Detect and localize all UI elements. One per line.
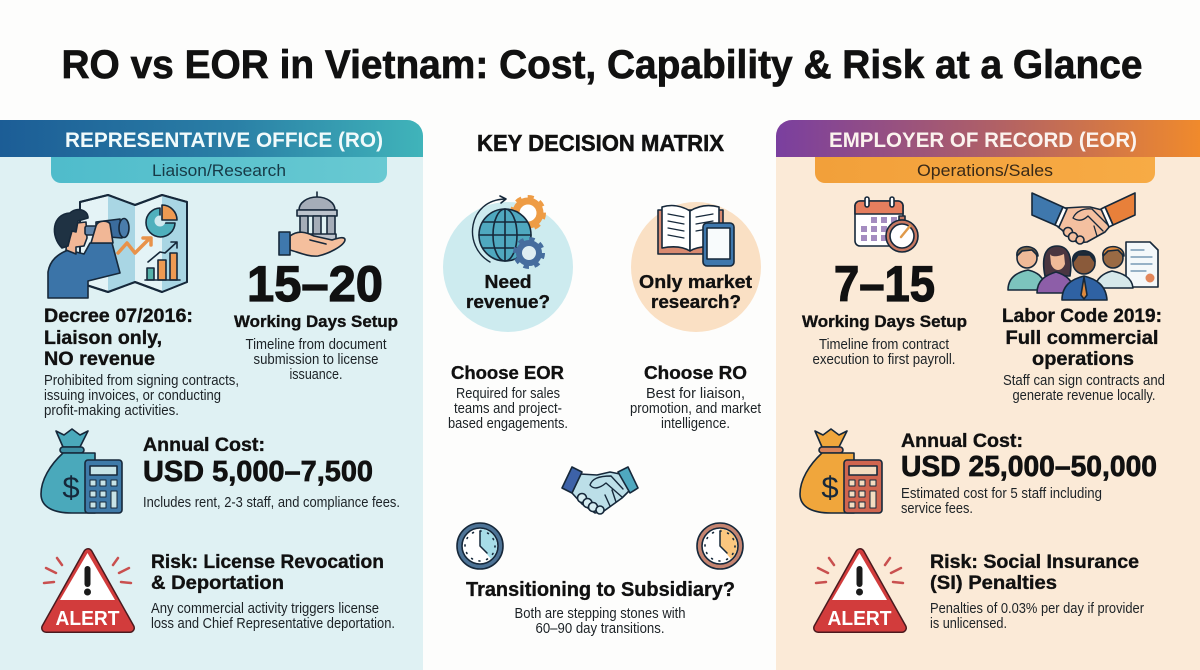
stat: RO setup days: 15–20 — [247, 256, 383, 312]
text block: choose EOR: based engagements. — [448, 416, 568, 432]
heading: key decision matrix: KEY DECISION MATRIX — [477, 130, 725, 156]
text block: labor code 2019: Staff can sign contracts and — [1003, 373, 1165, 389]
text block: choose RO — [630, 362, 761, 432]
text block: EOR annual cost: Annual Cost: — [901, 430, 1023, 452]
text block: EOR annual cost: USD 25,000–50,000 — [901, 451, 1157, 483]
text block: decree 07/2016: NO revenue — [44, 348, 155, 370]
sub-header: operations/sales — [815, 157, 1155, 183]
icon: alert triangle — [44, 553, 131, 630]
sub-header: liaison/research: Liaison/Research — [152, 161, 286, 180]
text block: RO annual cost — [143, 434, 400, 511]
stat: RO setup days: Working Days Setup — [234, 312, 398, 331]
stat: EOR setup days: 7–15 — [834, 256, 935, 312]
decision: need revenue — [443, 196, 573, 332]
panel header: RO — [0, 120, 423, 157]
icon: alert triangle: ALERT — [56, 608, 120, 630]
text block: transitioning to subsidiary: 60–90 day transitions. — [536, 621, 664, 637]
decision: need revenue: Need — [484, 271, 532, 292]
text block: transitioning to subsidiary: Transitioning to Subsidiary? — [466, 579, 735, 601]
text block: decree 07/2016: Decree 07/2016: — [44, 305, 193, 327]
text block: RO risk: Risk: License Revocation — [151, 551, 384, 573]
sub-header: operations/sales: Operations/Sales — [917, 161, 1053, 180]
text block: transitioning to subsidiary: Both are stepping stones with — [514, 606, 686, 622]
icon: money bag and calculator: $ — [821, 470, 839, 505]
text block: RO annual cost: USD 5,000–7,500 — [143, 456, 373, 488]
stat: EOR setup days: execution to first payroll. — [812, 352, 956, 368]
decision: only market research: research? — [651, 291, 741, 312]
panel: key decision matrix — [443, 130, 761, 637]
text block: RO annual cost: Annual Cost: — [143, 434, 265, 456]
text block: decree 07/2016: profit-making activities. — [44, 403, 179, 419]
icon: alert triangle: ALERT — [828, 608, 892, 630]
decision: only market research: Only market — [639, 271, 752, 292]
text block: decree 07/2016 — [44, 305, 239, 419]
panel: employer of record — [776, 120, 1200, 670]
text block: labor code 2019: generate revenue locally. — [1012, 388, 1156, 404]
icon: alert triangle — [816, 553, 903, 630]
text block: EOR risk: Penalties of 0.03% per day if provider — [930, 601, 1144, 617]
icon: calendar and stopwatch — [855, 197, 918, 252]
text block: RO risk — [151, 551, 395, 632]
stat: RO setup days: submission to license — [254, 352, 378, 368]
text block: choose EOR: Required for sales — [456, 386, 560, 402]
icon: staff team and contract — [1008, 242, 1158, 300]
text block: EOR risk — [930, 551, 1144, 632]
panel header: RO: REPRESENTATIVE OFFICE (RO) — [65, 129, 383, 152]
text block: EOR annual cost — [901, 430, 1157, 517]
text block: choose RO: intelligence. — [661, 416, 730, 432]
icon: money bag and calculator — [41, 429, 122, 513]
text block: EOR risk: (SI) Penalties — [930, 572, 1057, 594]
icon: clock (EOR) — [697, 523, 743, 569]
text block: labor code 2019: operations — [1032, 348, 1134, 370]
stat: RO setup days — [234, 256, 398, 383]
text block: choose RO: Best for liaison, — [646, 386, 745, 402]
text block: choose RO: Choose RO — [644, 362, 747, 383]
text block: RO risk: Any commercial activity triggers license — [151, 601, 379, 617]
text block: decree 07/2016: issuing invoices, or conducting — [44, 388, 221, 404]
stat: RO setup days: Timeline from document — [246, 337, 386, 353]
text block: choose EOR: teams and project- — [454, 401, 562, 417]
text block: EOR annual cost: service fees. — [901, 501, 973, 517]
text block: transitioning to subsidiary — [466, 579, 735, 637]
text block: RO risk: & Deportation — [151, 572, 284, 594]
text block: EOR risk: Risk: Social Insurance — [930, 551, 1139, 573]
icon: business handshake — [1032, 193, 1135, 244]
icon: money bag and calculator — [800, 429, 882, 513]
text block: labor code 2019 — [1002, 305, 1165, 404]
text block: RO annual cost: Includes rent, 2-3 staff, and compliance fees. — [143, 495, 400, 511]
decision: only market research — [631, 202, 761, 332]
panel header: EOR: EMPLOYER OF RECORD (EOR) — [829, 129, 1137, 152]
panel: representative office — [0, 120, 423, 670]
text block: EOR annual cost: Estimated cost for 5 staff including — [901, 486, 1102, 502]
sub-header: liaison/research — [51, 157, 387, 183]
icon: money bag and calculator: $ — [62, 470, 80, 505]
text block: labor code 2019: Labor Code 2019: — [1002, 305, 1162, 327]
text block: labor code 2019: Full commercial — [1006, 327, 1158, 349]
text block: RO risk: loss and Chief Representative deportation. — [151, 616, 395, 632]
text block: choose EOR — [448, 362, 568, 432]
icon: globe and gears — [472, 196, 544, 267]
stat: EOR setup days: Timeline from contract — [819, 337, 949, 353]
decision: need revenue: revenue? — [466, 291, 550, 312]
text block: EOR risk: is unlicensed. — [930, 616, 1007, 632]
icon: book and tablet — [658, 206, 734, 266]
stat: EOR setup days — [802, 256, 967, 368]
stat: RO setup days: issuance. — [290, 367, 342, 383]
text block: choose RO: promotion, and market — [630, 401, 761, 417]
text block: decree 07/2016: Liaison only, — [44, 327, 162, 349]
stat: EOR setup days: Working Days Setup — [802, 312, 967, 331]
title: RO vs EOR in Vietnam: Cost, Capability & Risk at a Glance — [62, 43, 1142, 87]
icon: handshake — [562, 467, 638, 514]
text block: decree 07/2016: Prohibited from signing contracts, — [44, 373, 239, 389]
text block: choose EOR: Choose EOR — [451, 362, 564, 383]
icon: person with binoculars and map — [48, 195, 187, 298]
panel header: EOR — [776, 120, 1200, 157]
icon: clock (RO) — [457, 523, 503, 569]
icon: hand holding institution — [279, 192, 345, 256]
